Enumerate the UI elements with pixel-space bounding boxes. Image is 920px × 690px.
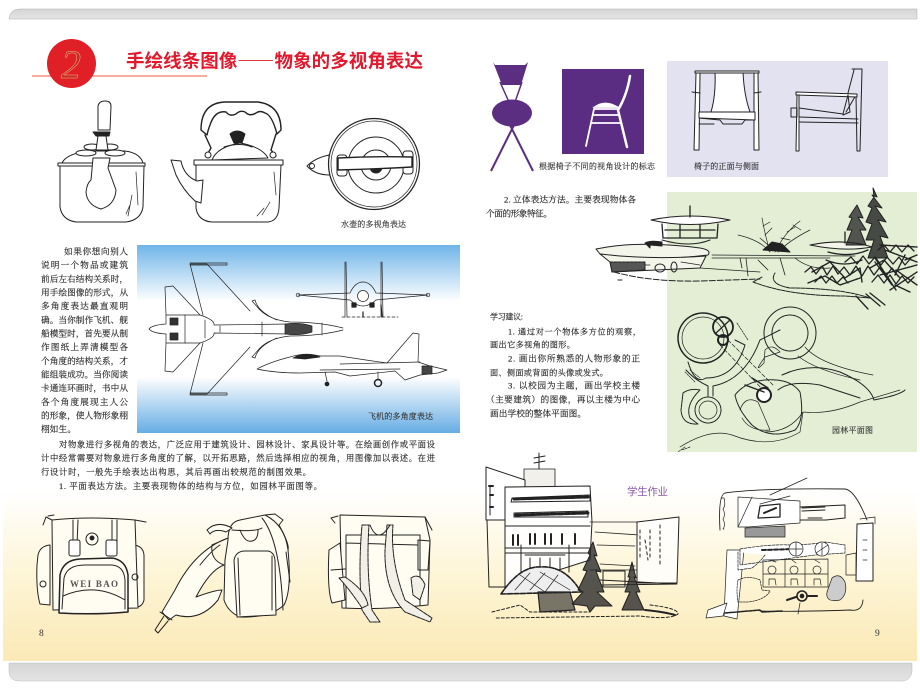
body text: left column: 作图纸上弄清模型各 — [41, 341, 128, 352]
text: study suggestions: 学习建议: — [490, 312, 523, 322]
body text: left column: 用手绘图像的形式，从 — [41, 286, 128, 298]
body text: left column: 的形象，使人物形象栩 — [41, 410, 128, 422]
logo: chair side view on purple — [562, 69, 644, 154]
text: 3D method: 个面的形象特征。 — [486, 208, 552, 218]
backpack: back view — [328, 515, 432, 622]
chair: front view — [692, 71, 761, 150]
garden plan — [678, 307, 905, 452]
bottom grey bar — [9, 663, 912, 681]
aircraft: side view — [257, 333, 447, 386]
panel: aircraft views — [137, 245, 460, 433]
aircraft: top view — [149, 263, 343, 395]
body text: left column — [41, 246, 128, 434]
text: study suggestions: 1. 通过对一个物体多方位的观察， — [508, 326, 641, 338]
student work: campus plan sketch — [706, 478, 875, 619]
title rule — [32, 75, 207, 77]
body text: left column: 前后左右结构关系时， — [41, 273, 128, 285]
caption: garden plan: 园林平面图 — [832, 425, 873, 435]
green background — [667, 192, 917, 452]
heading: section title — [32, 39, 423, 88]
text: 3D method: 2. 立体表达方法。主要表现物体各 — [504, 194, 636, 204]
body text: left column: 栩如生。 — [41, 423, 76, 434]
text: study suggestions: 画出学校的整体平面图。 — [490, 408, 586, 418]
text: study suggestions: 3. 以校园为主题，画出学校主楼 — [508, 380, 640, 392]
purple square — [562, 69, 644, 154]
number badge: 2 — [61, 42, 81, 87]
title text: 手绘线条图像——物象的多视角表达 — [126, 48, 423, 74]
backpack: side view — [155, 514, 290, 633]
body text: left column: 卡通连环画时，书中从 — [41, 382, 128, 394]
body text: left column: 说明一个物品或建筑 — [41, 259, 128, 270]
text: study suggestions: （主要建筑）的图像，再以主楼为中心 — [486, 394, 640, 406]
body text: left column: 如果你想向别人 — [64, 246, 128, 256]
caption: chair logos: 根据椅子不同的视角设计的标志 — [539, 161, 656, 171]
body text: left column: 个角度的结构关系，才 — [41, 355, 128, 367]
body text: paragraph: 1. 平面表达方法。主要表现物体的结构与方位，如园林平面图等。 — [59, 481, 322, 492]
text: study suggestions — [486, 312, 641, 418]
body text: paragraph: 行设计时，一般先手绘表达出构思，其后再画出较规范的制图效果。 — [41, 467, 311, 478]
body text: left column: 能组装成功。当你阅读 — [41, 368, 128, 380]
logo: chair from front — [491, 62, 533, 171]
body text: paragraph: 计中经常需要对物象进行多角度的了解，以开拓思路，然后选择相应的视角，用图像加以表述。在进 — [41, 453, 436, 464]
chair: side view — [791, 69, 862, 151]
body text: left column: 确。当你制作飞机、舰 — [41, 314, 128, 325]
number badge — [47, 39, 96, 88]
panel: chair front and side — [667, 61, 888, 177]
panel: garden — [596, 188, 917, 452]
caption: aircraft: 飞机的多角度表达 — [368, 411, 433, 421]
backpack: front view: WEI BAO — [70, 579, 118, 589]
text: study suggestions: 画出它多视角的图形。 — [490, 340, 575, 350]
text: study suggestions: 面、侧面或背面的头像或发式。 — [490, 368, 608, 378]
kettle: side view — [171, 102, 283, 222]
body text: left column: 船模型时，首先要从制 — [41, 328, 128, 340]
text: 3D method — [486, 194, 636, 218]
body text: paragraph: 对物象进行多视角的表达，广泛应用于建筑设计、园林设计、家具设计等。在绘画创作或平面设 — [59, 440, 436, 450]
page number: 8: 8 — [39, 629, 44, 639]
body text: paragraph — [41, 440, 436, 492]
student work: building sketch — [486, 453, 679, 618]
body text: left column: 各个角度展现主人公 — [41, 396, 128, 407]
kettle: front view — [58, 101, 145, 222]
top grey bar — [9, 9, 917, 19]
aircraft: front view — [296, 262, 430, 317]
lavender background — [667, 61, 888, 177]
sky background — [137, 245, 460, 433]
white chair glyph — [586, 76, 630, 147]
label: student work: 学生作业 — [627, 485, 668, 498]
body text: left column: 多角度表达最直观明 — [41, 300, 128, 311]
page number: 9: 9 — [875, 629, 880, 639]
backpack: front view — [37, 515, 146, 614]
kettle: top view — [307, 118, 420, 210]
garden building perspective — [596, 188, 917, 309]
text: study suggestions: 2. 画出你所熟悉的人物形象的正 — [508, 352, 640, 364]
caption: chairs: 椅子的正面与侧面 — [694, 161, 759, 171]
caption: kettle: 水壶的多视角表达 — [341, 219, 406, 229]
